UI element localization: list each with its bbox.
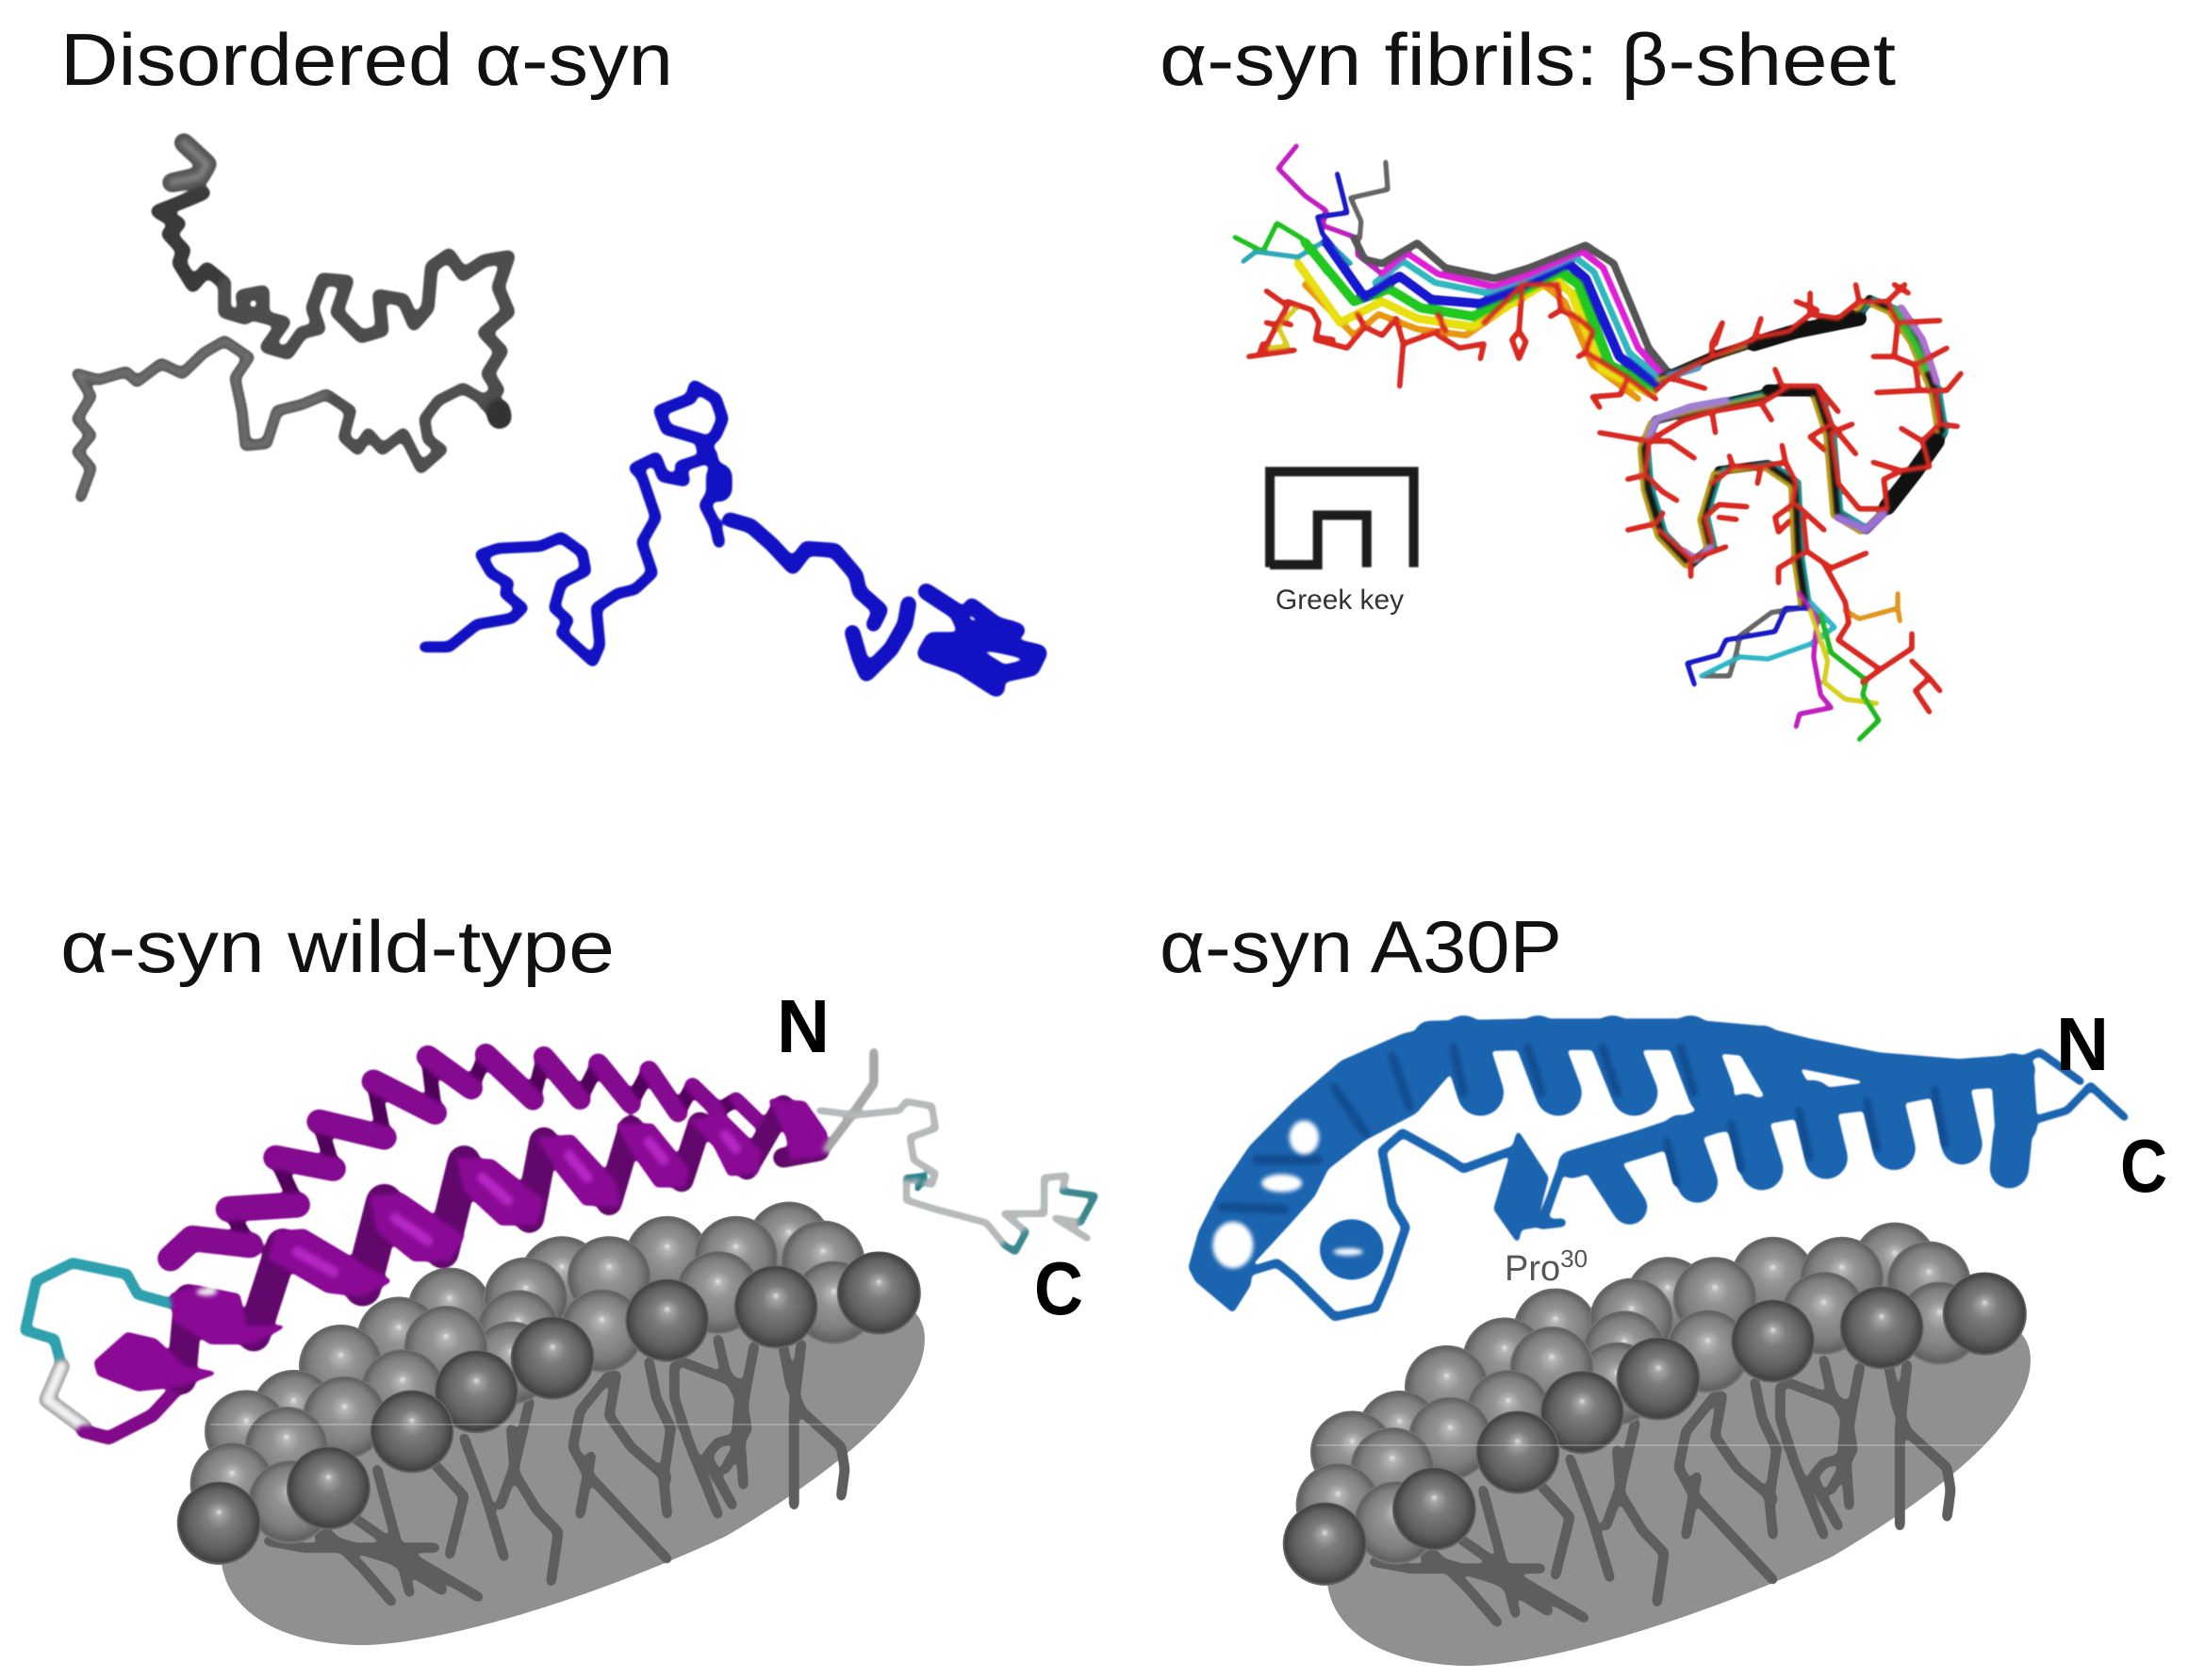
lipid bilayer A30P — [1283, 1223, 2031, 1666]
title: α-syn fibrils β-sheet: α-syn fibrils: β-sheet — [1160, 18, 1896, 101]
left arc holes and shading — [1290, 1120, 1319, 1155]
folded band colours — [1639, 298, 1947, 609]
upper helix bands — [1463, 1039, 1480, 1093]
title: α-syn A30P: α-syn A30P — [1160, 905, 1562, 988]
fibril backbone rainbow ribbon — [1235, 146, 1961, 739]
lower helix bands — [1599, 1160, 1630, 1207]
blue helix A30P — [1189, 1023, 2125, 1317]
title: α-syn wild-type: α-syn wild-type — [60, 905, 615, 988]
label: Pro30: 30 — [1560, 1244, 1588, 1273]
disordered loop N side — [25, 1263, 171, 1366]
label: C wild-type: C — [1034, 1246, 1083, 1330]
blue disordered coil — [424, 386, 1038, 688]
helix hole — [196, 1289, 217, 1295]
C-terminal tail — [827, 1052, 874, 1148]
terminal tails bottom — [1687, 593, 1900, 739]
icon: Greek key topology — [1270, 471, 1414, 568]
terminal tails top — [1235, 146, 1388, 348]
left arc silhouette — [1189, 1023, 1457, 1312]
label: N A30P: N — [2056, 1002, 2109, 1086]
helix highlights — [297, 1135, 736, 1272]
thin loop — [1233, 1133, 1518, 1317]
red side chains — [1249, 285, 1961, 712]
label: N wild-type: N — [777, 984, 830, 1068]
terminal tails — [2019, 1052, 2081, 1081]
wave band colours — [1298, 239, 1673, 399]
lipid bilayer wild-type — [177, 1202, 925, 1645]
label: Pro30: Pro — [1505, 1249, 1560, 1289]
purple helix wild-type — [25, 1052, 1094, 1438]
small helix ring — [1321, 1220, 1383, 1279]
label: Greek key: Greek key — [1276, 585, 1404, 616]
lower helix arc — [1572, 1081, 1945, 1164]
gray disordered coil — [77, 142, 509, 497]
lower helix front ribbons — [94, 1099, 827, 1391]
lower helix back strands — [181, 1106, 819, 1379]
beta arrow at Pro30 — [1494, 1130, 1562, 1243]
title: Disordered α-syn: Disordered α-syn — [60, 18, 673, 101]
upper helix back strands — [228, 1054, 762, 1245]
upper helix front strands — [171, 1054, 762, 1259]
top arc of upper helix — [1429, 1034, 2019, 1075]
label: C A30P: C — [2120, 1124, 2167, 1208]
